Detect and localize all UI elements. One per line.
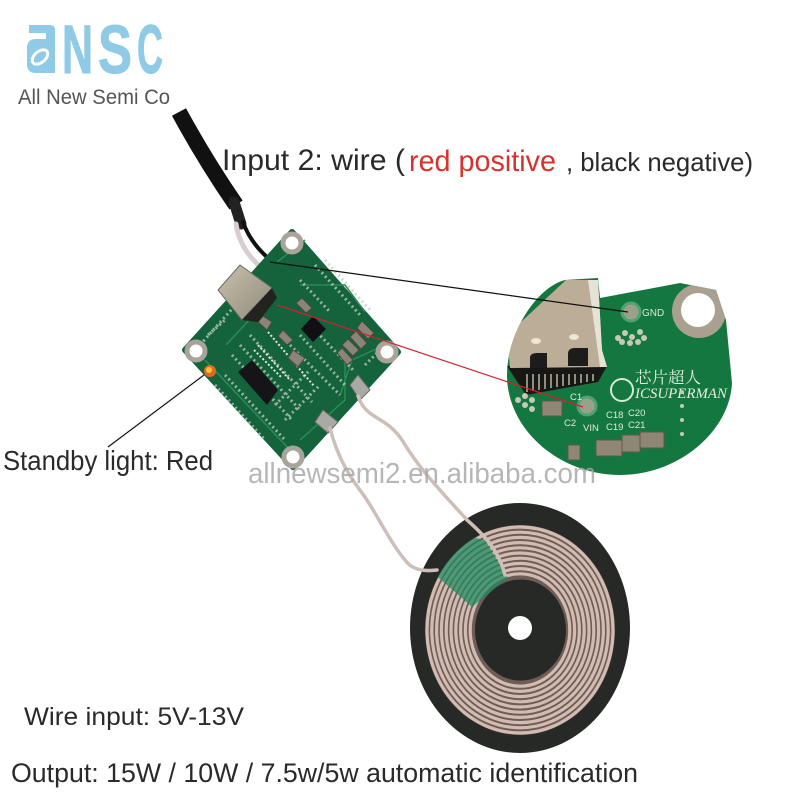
inset silkscreen labels bbox=[564, 394, 646, 431]
logo letters bbox=[62, 11, 163, 88]
inset VIN pad bbox=[578, 397, 596, 415]
inset connector shell bbox=[507, 280, 607, 368]
pointer: red VIN leader bbox=[277, 305, 583, 407]
component dots bbox=[200, 260, 385, 440]
pointer: black GND leader bbox=[270, 262, 628, 312]
inset: USB-C close-up bbox=[507, 278, 732, 475]
inset silkscreen labels: C20 bbox=[628, 408, 645, 419]
standby LED bbox=[204, 365, 216, 377]
coil base bbox=[420, 520, 620, 740]
inset hole bbox=[681, 293, 715, 327]
heading: input 2 wire polarity: red positive bbox=[409, 145, 556, 178]
label: standby light: Standby light: Red bbox=[3, 445, 213, 476]
inset silkscreen labels: C2 bbox=[564, 418, 576, 429]
inset pcb bbox=[507, 278, 732, 475]
inset capacitors bbox=[542, 401, 664, 460]
pcb traces bbox=[205, 240, 385, 450]
heading: input 2 wire polarity bbox=[222, 144, 753, 178]
solder pads bbox=[315, 375, 370, 433]
inset GND pad bbox=[622, 303, 640, 321]
power chip bbox=[301, 316, 326, 342]
inset GND label: GND bbox=[642, 308, 664, 319]
green tape bbox=[438, 538, 508, 607]
logo letters: C bbox=[137, 11, 163, 88]
pointer: standby LED leader bbox=[108, 375, 204, 447]
circuit board bbox=[185, 232, 398, 467]
inset silkscreen labels: C21 bbox=[628, 420, 645, 431]
heading: input 2 wire polarity: , black negative) bbox=[566, 147, 753, 177]
USB Type-C connector bbox=[218, 265, 277, 322]
logo mark: stylised a bbox=[27, 25, 55, 73]
pcb outline bbox=[185, 232, 398, 467]
inset connector pins bbox=[507, 366, 607, 395]
inset small parts bbox=[515, 390, 684, 436]
inset hole ring bbox=[672, 284, 726, 338]
inset brand logo mark bbox=[611, 379, 633, 401]
coil windings bbox=[427, 527, 613, 733]
power cable bbox=[179, 112, 276, 303]
coil bbox=[410, 503, 630, 753]
inset silkscreen labels: C18 bbox=[606, 410, 623, 421]
logo letters: N bbox=[62, 11, 93, 88]
heading: input 2 wire polarity: Input 2: wire ( bbox=[222, 144, 405, 177]
capacitors bbox=[258, 298, 374, 367]
logo tagline: All New Semi Co bbox=[18, 86, 170, 109]
inset silkscreen labels: C1 bbox=[570, 392, 582, 403]
inset silkscreen labels: VIN bbox=[583, 423, 599, 434]
coil lead wires bbox=[330, 396, 505, 575]
watermark: allnewsemi2.en.alibaba.com bbox=[248, 458, 596, 490]
label: output: Output: 15W / 10W / 7.5w/5w automatic identification bbox=[11, 758, 638, 788]
inset via cluster bbox=[615, 329, 647, 346]
mounting holes bbox=[187, 234, 396, 466]
label: wire input: Wire input: 5V-13V bbox=[24, 703, 244, 731]
logo letters: S bbox=[98, 11, 132, 88]
inset brand chinese: 芯片超人 bbox=[635, 365, 701, 388]
logo: ANSC bbox=[18, 11, 170, 109]
resistor row bbox=[254, 332, 314, 386]
coil backing disc bbox=[410, 503, 630, 753]
main chip bbox=[238, 360, 278, 405]
inset silkscreen labels: C19 bbox=[606, 422, 623, 433]
inset brand latin: ICSUPERMAN bbox=[634, 386, 728, 402]
